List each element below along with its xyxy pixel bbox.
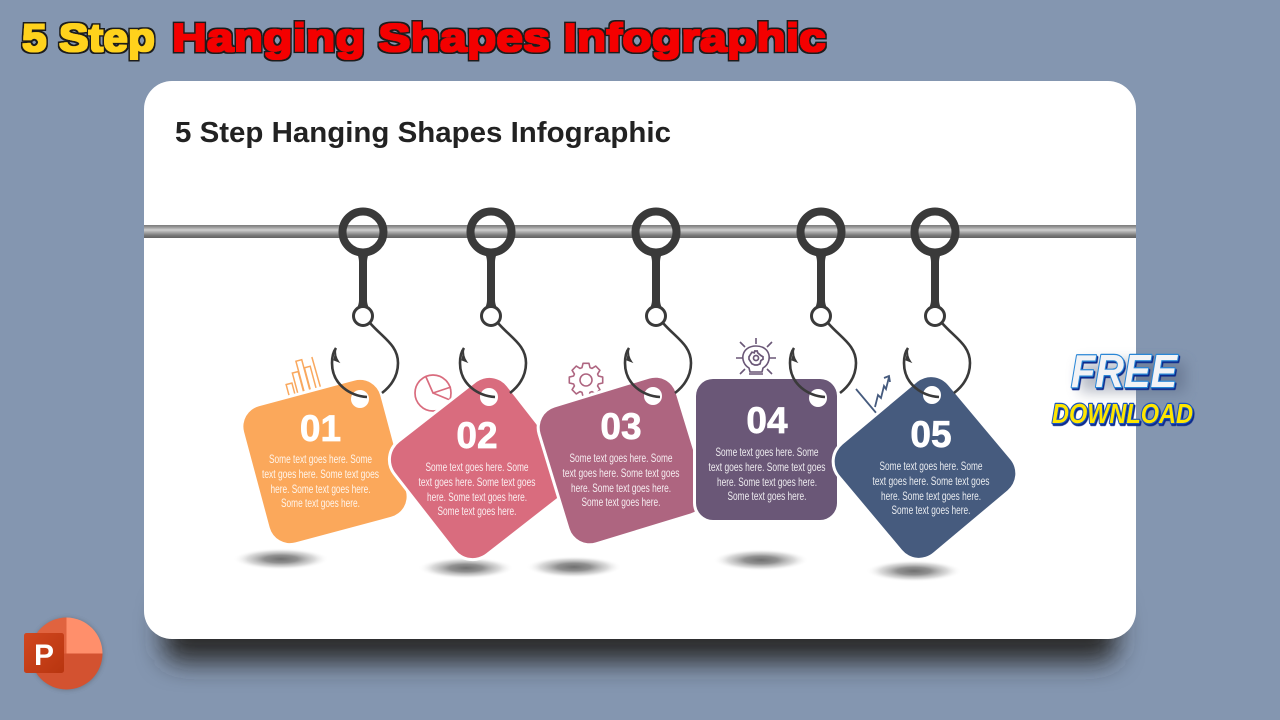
card 1 text: text goes here. Some text goes [262,467,379,481]
hook 2 [460,212,526,397]
logo letter: P [34,639,54,672]
card 1 text [262,452,379,510]
card 3 number: 03 [600,406,642,447]
logo disc shadow [30,618,104,690]
card 3 hole [644,387,662,405]
banner title: yellow part: 5 Step [22,17,155,60]
card 5 text: text goes here. Some text goes [872,474,990,488]
card 3 text: text goes here. Some text goes [562,466,680,480]
logo square [24,633,64,673]
card 5 text: Some text goes here. [892,503,970,517]
card 2 text [418,460,536,518]
card 3 [534,372,711,549]
shadow 5 [866,560,962,582]
card 3 text: Some text goes here. [582,495,660,509]
card 5 hole [923,386,941,404]
card 5 text [872,459,990,517]
logo quadrant top-right [66,618,102,654]
card 2 text: text goes here. Some text goes [418,475,536,489]
card 4 text: here. Some text goes here. [717,475,817,489]
card 5 [826,368,1024,567]
card 5 number: 05 [910,414,952,455]
hanging rod [144,225,1136,238]
card 1 hole [351,390,369,408]
card 2 text: Some text goes here. [438,504,516,518]
top banner title [22,17,826,60]
hook 1 [332,212,398,397]
card 4 text: Some text goes here. Some [716,445,819,459]
icon: growth chart [856,376,902,414]
card 4 hole [809,389,827,407]
hook 3 [625,212,691,397]
card 3 text: here. Some text goes here. [571,481,671,495]
card 5 shape [826,368,1024,567]
card 2 number: 02 [456,415,498,456]
badge soft shadow [1080,362,1185,392]
card 4 text: Some text goes here. [728,489,806,503]
card 2 shape [382,369,580,567]
shadow 4 [713,549,809,571]
hook 4 [790,212,856,397]
floor shadows [233,548,962,582]
free download badge [1052,345,1193,429]
card 1 number: 01 [300,408,341,449]
icon: bar chart [281,357,321,399]
shadow 3 [526,556,622,578]
card 5 text: Some text goes here. Some [880,459,983,473]
card 1 shape [239,375,411,548]
card 4 shape [696,379,837,520]
badge: DOWNLOAD: DOWNLOAD [1052,398,1193,429]
logo quadrant top-left [30,618,66,654]
banner title: red part: Hanging Shapes Infographic [172,17,826,60]
card 4 text: text goes here. Some text goes [708,460,826,474]
card 3 text [562,451,680,509]
panel shadow [163,600,1117,662]
card 2 text: here. Some text goes here. [427,490,527,504]
card 2 hole [480,388,498,406]
hook 5 [904,212,970,397]
card 4 text [708,445,826,503]
card 5 text: here. Some text goes here. [881,489,981,503]
white panel [144,81,1136,639]
card 4 number: 04 [746,400,788,441]
shadow 2 [418,557,514,579]
icon: pie chart [415,375,451,411]
icon: light bulb [736,338,776,381]
card 3 shape [534,372,711,549]
card 1 text: here. Some text goes here. [270,482,370,496]
icon: gear [569,363,603,397]
logo quadrant bottom [30,654,102,690]
card 3 text: Some text goes here. Some [570,451,673,465]
card 2 text: Some text goes here. Some [426,460,529,474]
card 2 [382,369,580,567]
icon: PowerPoint logo [24,618,104,690]
card 4 [696,379,837,520]
card 1 text: Some text goes here. Some [269,452,372,466]
panel heading: 5 Step Hanging Shapes Infographic [175,117,671,149]
card 1 text: Some text goes here. [281,496,360,510]
badge: FREE: FREE [1071,345,1178,397]
card 1 [239,375,411,548]
shadow 1 [233,548,329,570]
